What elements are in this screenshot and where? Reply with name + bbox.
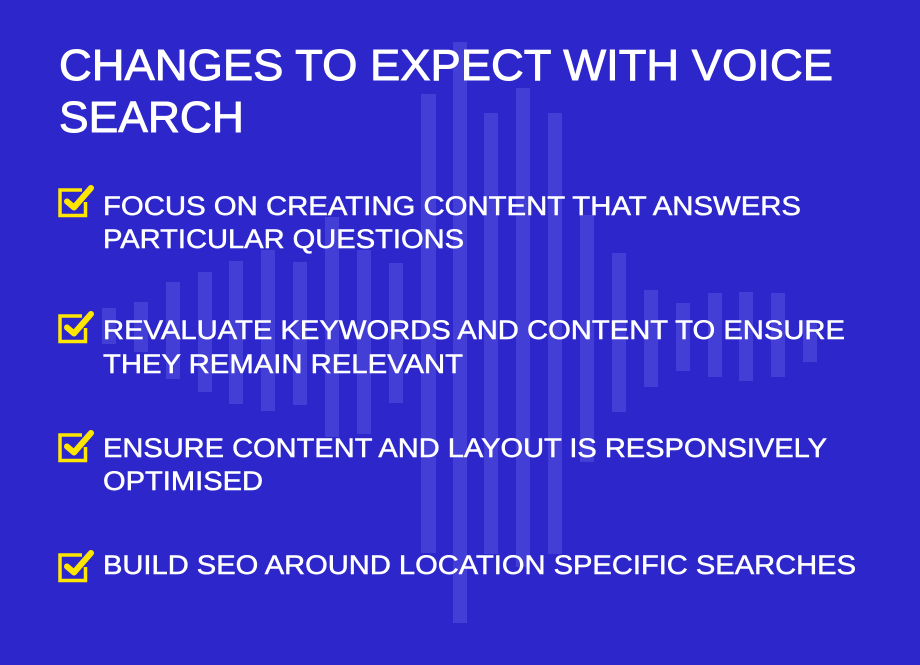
item 1 text bbox=[103, 191, 801, 254]
item 3 text bbox=[103, 433, 827, 496]
item 1 text: PARTICULAR QUESTIONS bbox=[103, 224, 464, 254]
item 3 text: ENSURE CONTENT AND LAYOUT IS RESPONSIVELY bbox=[103, 433, 827, 463]
checklist item 1 bbox=[60, 188, 801, 254]
icon: yellow checkbox bbox=[60, 314, 91, 342]
item 2 text bbox=[103, 315, 845, 379]
item 4 text: BUILD SEO AROUND LOCATION SPECIFIC SEARCHES bbox=[103, 550, 856, 580]
item 1 text: FOCUS ON CREATING CONTENT THAT ANSWERS bbox=[103, 191, 801, 221]
checklist item 3 bbox=[60, 433, 827, 496]
checklist item 4 bbox=[60, 550, 856, 580]
icon: yellow checkbox bbox=[60, 188, 91, 216]
icon: yellow checkbox bbox=[60, 433, 91, 460]
title: CHANGES TO EXPECT WITH VOICE bbox=[59, 41, 833, 90]
item 2 text: THEY REMAIN RELEVANT bbox=[103, 349, 463, 379]
title: SEARCH bbox=[59, 93, 244, 142]
background soundwave bars bbox=[102, 42, 817, 623]
checklist item 2 bbox=[60, 314, 845, 379]
item 3 text: OPTIMISED bbox=[103, 466, 263, 496]
title bbox=[59, 41, 833, 142]
item 2 text: REVALUATE KEYWORDS AND CONTENT TO ENSURE bbox=[103, 315, 845, 345]
icon: yellow checkbox bbox=[60, 553, 91, 580]
